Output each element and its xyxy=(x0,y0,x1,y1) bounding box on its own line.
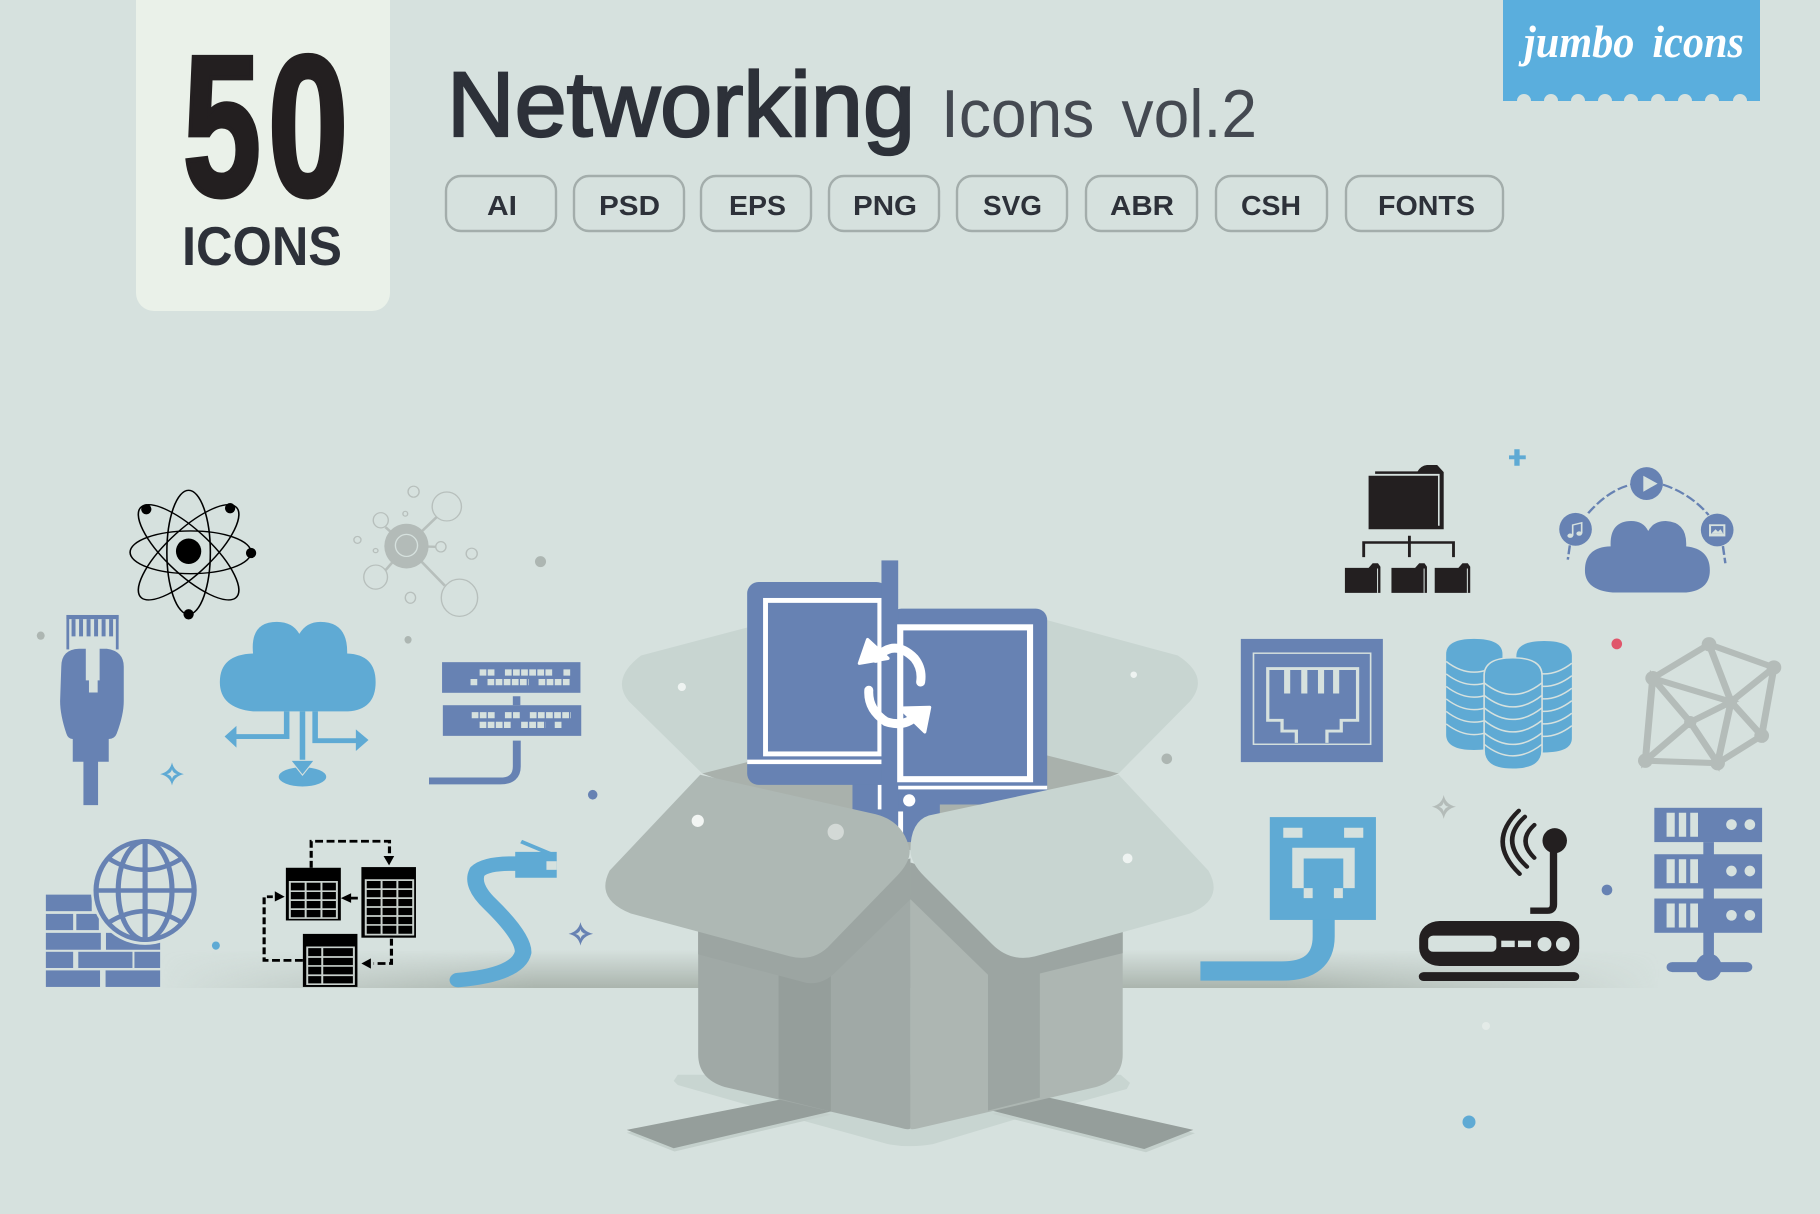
format tags: SVG xyxy=(983,190,1042,221)
back flaps xyxy=(622,620,1198,773)
front right flap xyxy=(910,775,1214,958)
monitors with sync arrows xyxy=(747,560,1047,850)
icon: database stacks xyxy=(1446,639,1572,769)
format tags: EPS xyxy=(729,190,786,221)
format tags: AI xyxy=(487,190,517,221)
badge: 50 icons xyxy=(136,0,390,311)
icon: cloud media xyxy=(1559,467,1734,592)
icon: mesh network xyxy=(1638,637,1781,770)
icon: folder hierarchy xyxy=(1345,465,1470,593)
icon: server rack xyxy=(1654,808,1762,981)
number 50: 0 xyxy=(268,14,348,237)
icon: firewall globe xyxy=(46,836,199,987)
format tags: FONTS xyxy=(1378,190,1475,221)
brand ribbon: jumbo icons xyxy=(1503,0,1760,108)
format tags: PNG xyxy=(853,190,917,221)
box interior xyxy=(702,744,1119,850)
icon: wifi router xyxy=(1419,811,1579,981)
icon: linked tables xyxy=(264,841,416,987)
decorative sparkles and dots xyxy=(37,556,597,950)
sparkle dots xyxy=(678,671,1172,863)
format tags: CSH xyxy=(1241,190,1301,221)
icon: RJ45 socket xyxy=(1241,639,1383,762)
box body xyxy=(698,858,1123,1129)
icon: network switch xyxy=(429,662,581,781)
icon: wall port cable xyxy=(1200,817,1376,971)
title xyxy=(447,54,1257,156)
decorative marks xyxy=(1432,449,1622,895)
subtitle: Icons vol.2 xyxy=(941,76,1257,152)
brand ribbon: jumbo icons: jumbo icons xyxy=(1518,16,1744,67)
icon: ethernet plug xyxy=(60,615,124,805)
format tags: PSD xyxy=(599,190,660,221)
title: Networking xyxy=(447,54,915,156)
number 50 xyxy=(183,14,348,238)
ground shadow band xyxy=(221,956,1599,988)
icon: network hub xyxy=(354,486,478,616)
number 50: 5 xyxy=(183,14,261,238)
right icon cluster xyxy=(1200,449,1781,981)
floor ribbons xyxy=(627,1097,1195,1152)
front left flap xyxy=(605,775,910,958)
floating dots xyxy=(1462,1022,1490,1128)
box floor shadow xyxy=(674,1075,1130,1146)
icon: patch cable xyxy=(458,842,557,980)
label ICONS: ICONS xyxy=(182,215,342,277)
format tags: ABR xyxy=(1110,190,1174,221)
icon: cloud distribution xyxy=(220,622,376,786)
format tags xyxy=(446,176,1503,231)
icon: atom xyxy=(124,490,256,619)
left icon cluster xyxy=(37,486,597,987)
open box illustration xyxy=(605,560,1214,1152)
